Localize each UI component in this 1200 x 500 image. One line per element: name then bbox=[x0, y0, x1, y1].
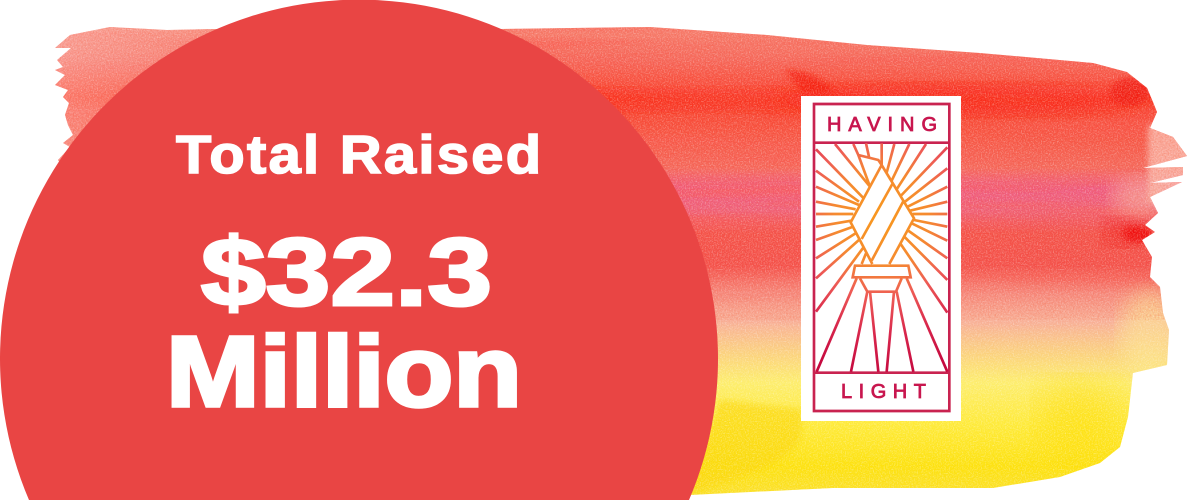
heading: Total Raised: Total Raised bbox=[176, 124, 543, 185]
logo torch artwork bbox=[814, 104, 949, 411]
red circle panel bbox=[0, 0, 718, 500]
logo white card bbox=[801, 96, 961, 421]
logo word: LIGHT: LIGHT bbox=[841, 381, 926, 403]
logo: Having Light bbox=[801, 96, 961, 421]
logo word: HAVING: HAVING bbox=[827, 114, 937, 136]
amount unit: Million: Million bbox=[166, 316, 522, 428]
amount: $32.3: $32.3 bbox=[201, 219, 492, 326]
